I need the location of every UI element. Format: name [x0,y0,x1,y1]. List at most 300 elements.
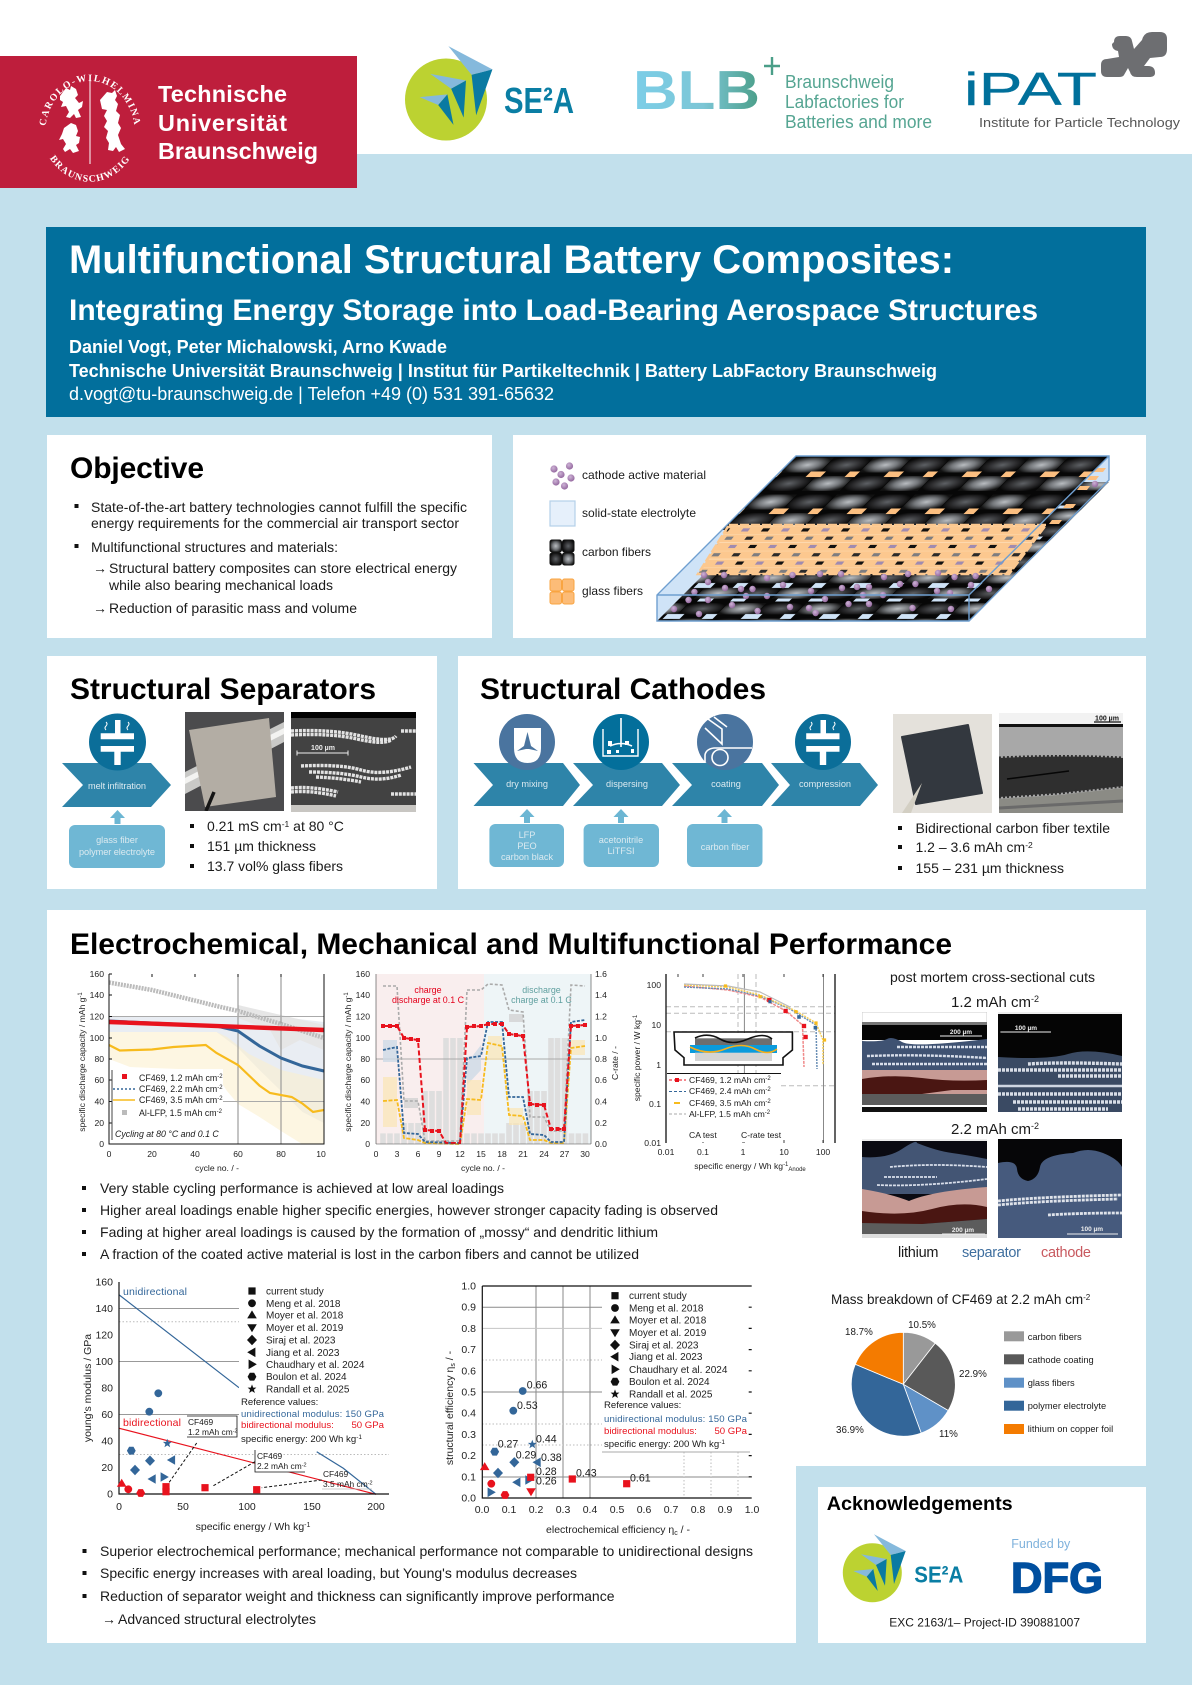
legend chart 4: Siraj et al. 2023 [266,1336,336,1346]
right ticks chart 2: 1.6 [595,969,607,979]
left ticks chart 2: 120 [356,1012,370,1022]
callouts chart 4: -2 [302,1462,307,1468]
legend chart 3 [667,1074,782,1142]
chart: mass breakdown pie [831,1292,1113,1440]
axis ticks chart 4: 20 [101,1462,113,1474]
process chevrons: dispersing [606,779,648,789]
separator properties list: 151 µm thickness [207,838,316,854]
heading: acknowledgements: Acknowledgements [827,1493,1013,1515]
legend chart 1: -2 [217,1074,223,1080]
icon: electrolyte square [550,501,575,526]
axis ticks chart 3: 0.01 [644,1138,661,1148]
legend chart 1: -2 [217,1085,223,1091]
axis ticks chart 5: 0.1 [461,1471,476,1483]
x ticks chart 2: 15 [476,1149,486,1159]
rate annotations: charge at 0.1 C [511,995,572,1005]
y-axis ticks chart 1: 60 [94,1075,104,1085]
right ticks chart 2: 1.0 [595,1033,607,1043]
reference box chart 5: unidirectional modulus: 150 GPa [604,1414,748,1425]
logo: TU Braunschweig: CAROLO-WILHELMINA [40,74,140,126]
logo: BLB Braunschweig Labfactories [633,57,932,132]
axis titles chart 1: cycle no. / - [195,1163,239,1173]
axis ticks chart 5: 0.7 [664,1504,678,1516]
legend chart 5: Meng et al. 2018 [629,1304,704,1314]
axis ticks chart 5: 0.6 [637,1504,651,1516]
pie title: -2 [1083,1293,1091,1302]
axis ticks chart 5: 0.7 [461,1344,476,1356]
reference box chart 4: specific energy: 200 Wh kg [241,1434,356,1445]
cross-section title: post mortem cross-sectional cuts [890,969,1095,985]
header logo strip [0,0,1192,188]
separator properties list [190,818,344,874]
y-axis ticks chart 1: 80 [94,1054,104,1064]
input box: LFP PEO carbon black: LFP [519,830,535,840]
photo: cathode micrograph: 100 µm [1095,716,1119,722]
arrow up: dispersing input [614,809,628,823]
left ticks chart 2: 40 [360,1096,370,1106]
label: 1.2 mAh: 1.2 mAh cm [951,994,1031,1011]
reference box chart 4: 50 GPa [351,1420,385,1431]
x ticks chart 2: 0 [374,1149,379,1159]
value labels chart 5 [498,1379,651,1487]
legend chart 4 [247,1286,365,1396]
input box: acetonitrile LiTFSI: LiTFSI [607,846,635,856]
callouts chart 4: CF469 [323,1469,348,1479]
reference box chart 5: -1 [719,1439,725,1446]
x-axis ticks chart 1: 80 [276,1149,286,1159]
input box: glass fiber polymer electrolyte: glass fiber [96,835,138,845]
y-axis ticks chart 1: 40 [94,1096,104,1106]
schematic legend: solid-state electrolyte [582,506,696,520]
series markers chart 5 [480,1387,630,1499]
x ticks chart 2: 12 [455,1149,465,1159]
axis ticks chart 3: 10 [651,1020,661,1030]
axis ticks chart 3: 100 [816,1147,830,1157]
value labels chart 5: 0.66 [527,1379,547,1391]
legend chart 3: -2 [765,1110,771,1116]
legend chart 4: Moyer et al. 2019 [266,1323,344,1334]
axis ticks chart 4: 80 [101,1382,113,1394]
chart: capacity versus cycle number: specific discharge capacity / mAh g [77,998,87,1132]
right ticks chart 2: 0.2 [595,1118,607,1128]
value labels chart 5: 0.28 [536,1466,557,1478]
input box: carbon fiber [687,824,762,867]
photo: separator sheet [185,712,284,811]
logo: SE2A [405,46,574,141]
input box: glass fiber polymer electrolyte: polymer electrolyte [79,847,155,857]
axis ticks chart 3: 100 [647,980,661,990]
cathode properties list [898,820,1110,876]
axis ticks chart 4: 0 [116,1501,122,1513]
right ticks chart 2: 0.8 [595,1054,607,1064]
callouts chart 4: -2 [368,1480,373,1486]
legend chart 5 [610,1291,728,1400]
x ticks chart 2: 3 [395,1149,400,1159]
objective bullet list: State-of-the-art battery technologies cannot fulfill the specific [91,499,467,515]
photo: separator micrograph: 100 µm [311,745,335,752]
icon: glass fibers [550,579,574,604]
icon: hot press [89,714,146,770]
material outlook list: Specific energy increases with areal loading, but Young's modulus decreases [100,1565,577,1581]
panel: structural cathodes [458,656,1146,889]
legend chart 5: Jiang et al. 2023 [629,1352,703,1363]
axis ticks chart 4: 160 [95,1276,113,1288]
micrograph: 1.2 mAh overview [862,1012,987,1112]
label: 1.2 mAh: -2 [1031,994,1039,1004]
axis ticks chart 5: 0.0 [475,1504,489,1516]
logo: TU Braunschweig: Technische [158,81,287,107]
reference box chart 4: unidirectional modulus: 150 GPa [241,1409,385,1420]
arrow up: coating input [717,809,732,823]
legend chart 4: Meng et al. 2018 [266,1299,341,1310]
logo: BLB Braunschweig Labfactories: Labfactories for [785,92,904,112]
x-axis ticks chart 1 [107,1149,326,1159]
chart: young's modulus versus specific energy: young's modulus / GPa [82,1334,94,1442]
cathode properties list: 1.2 – 3.6 mAh cm [916,839,1025,855]
cycling findings list: Fading at higher areal loadings is caused by the formation of „mossy“ and dendritic lithium [100,1224,658,1240]
axis titles chart 5: c [674,1530,678,1537]
legend chart 4: current study [266,1286,324,1298]
title: Multifunctional Structural Battery Composites: [69,238,954,282]
axis ticks chart 3: 0.1 [649,1099,661,1109]
schematic legend: cathode active material [582,468,706,482]
axis ticks chart 5: 0.8 [691,1504,705,1516]
chart: structural versus electrochemical efficiency [444,1280,759,1537]
pie legend: lithium on copper foil [1028,1424,1113,1434]
chart: ragone plot: specific power / W kg [632,1020,642,1101]
micrograph: 2.2 mAh detail [998,1139,1122,1238]
pie percentages: 11% [939,1429,958,1440]
left ticks chart 2: 60 [360,1075,370,1085]
pie legend: cathode coating [1028,1355,1094,1365]
right ticks chart 2: 0.4 [595,1096,607,1106]
left ticks chart 2: 0 [365,1139,370,1149]
axis ticks chart 4: 100 [238,1501,256,1513]
reference box chart 5: specific energy: 200 Wh kg [604,1439,719,1450]
objective bullet list [74,499,467,616]
x ticks chart 2 [374,1149,590,1159]
separator properties list: -1 [282,819,290,829]
cross-section colour key: lithium [898,1245,938,1261]
schematic legend: carbon fibers [582,545,651,559]
legend chart 3: -2 [765,1099,771,1105]
value labels chart 5: 0.44 [536,1433,557,1445]
chart: capacity versus cycle number [77,969,326,1173]
x ticks chart 2: 9 [437,1149,442,1159]
legend chart 4: Moyer et al. 2018 [266,1310,344,1322]
y-axis ticks chart 1: 0 [99,1139,104,1149]
heading: structural separators: Structural Separators [70,673,376,706]
legend chart 5: current study [629,1291,687,1302]
value labels chart 5: 0.61 [630,1473,651,1485]
legend chart 1: CF469, 2.2 mAh cm [139,1084,217,1094]
separator properties list: 0.21 mS cm [207,818,282,834]
axis ticks chart 4: 200 [367,1501,385,1513]
cathode properties list: Bidirectional carbon fiber textile [916,820,1110,836]
chart: ragone plot [632,974,835,1173]
x ticks chart 2: 18 [497,1149,507,1159]
subtitle: Integrating Energy Storage into Load-Bearing Aerospace Structures [69,294,1038,327]
legend chart 1: -2 [217,1096,223,1102]
reference box chart 5: 50 GPa [714,1426,748,1437]
legend chart 5: Moyer et al. 2018 [629,1316,707,1326]
label: 2.2 mAh: -2 [1031,1121,1039,1131]
micrograph: 2.2 mAh overview: 200 µm [952,1227,974,1234]
layered composite block [657,456,1109,621]
legend chart 1: -2 [217,1109,223,1115]
axis ticks chart 4: 40 [101,1436,113,1448]
legend chart 3: -2 [765,1087,771,1093]
series markers chart 4 [117,1389,260,1497]
right ticks chart 2: 0.0 [595,1139,607,1149]
region labels chart 4: unidirectional [123,1286,187,1298]
value labels chart 5: 0.38 [541,1452,562,1464]
reference box chart 4: bidirectional modulus: [241,1420,334,1431]
reference box chart 4: Reference values: [241,1397,318,1408]
logo: iPAT: iPAT [964,63,1097,115]
y-axis ticks chart 1: 160 [90,969,104,979]
legend chart 3: -2 [765,1076,771,1082]
cathode properties list: -2 [1025,840,1033,850]
axis ticks chart 5: 0.0 [461,1492,476,1504]
rate annotations: charge [414,985,442,995]
process chevrons: dry mixing [506,779,548,789]
x-axis ticks chart 1: 0 [107,1149,112,1159]
legend chart 1: CF469, 1.2 mAh cm [139,1073,217,1083]
chart: rate capability [343,969,620,1173]
input box: glass fiber polymer electrolyte [69,825,165,868]
axis ticks chart 5: 0.2 [529,1504,543,1516]
logo: iPAT [964,32,1181,130]
micrograph: 1.2 mAh overview: 200 µm [950,1029,972,1036]
x-axis ticks chart 1: 60 [233,1149,243,1159]
logo: TU Braunschweig [0,56,357,188]
pie legend: glass fibers [1028,1378,1075,1388]
cycling findings list: Higher areal loadings enable higher specific energies, however stronger capacity fading is observed [100,1202,718,1218]
objective bullet list: → [93,600,107,616]
axis titles chart 4: -1 [304,1522,310,1529]
axis ticks chart 4: 140 [95,1303,113,1315]
material outlook list: Reduction of separator weight and thickness can significantly improve performance [100,1588,615,1604]
legend chart 3: CF469, 3.5 mAh cm [689,1098,765,1108]
callouts chart 4: 2.2 mAh cm [257,1461,302,1471]
axis ticks chart 5: 0.5 [610,1504,624,1516]
axis ticks chart 3: 1 [741,1147,746,1157]
x ticks chart 2: 27 [560,1149,569,1159]
material outlook list: Superior electrochemical performance; mechanical performance not comparable to unidirectional designs [100,1543,753,1559]
input box: acetonitrile LiTFSI [584,824,659,867]
x ticks chart 2: 24 [539,1149,549,1159]
legend chart 1: Cycling at 80 °C and 0.1 C [115,1129,219,1139]
axis ticks chart 4: 100 [95,1356,113,1368]
left ticks chart 2: 140 [356,990,370,1000]
photo: cathode micrograph [999,713,1123,813]
axis ticks chart 5: 0.4 [461,1408,476,1420]
left ticks chart 2: 100 [356,1033,370,1043]
rate annotations: discharge at 0.1 C [392,995,465,1005]
callouts chart 4 [169,1416,373,1489]
reference box chart 4: -1 [356,1434,362,1441]
process chevrons: compression [799,779,851,789]
callouts chart 4: -2 [233,1428,238,1434]
authors: Daniel Vogt, Peter Michalowski, Arno Kwade [69,337,447,357]
legend chart 5: Randall et al. 2025 [629,1390,713,1400]
pie title: Mass breakdown of CF469 at 2.2 mAh cm [831,1292,1083,1307]
cross-section colour key [898,1245,1091,1261]
chart: ragone plot: -1 [633,1014,639,1020]
y-axis ticks chart 1 [90,969,104,1149]
logo: iPAT: Institute for Particle Technology [979,116,1181,130]
right ticks chart 2: 1.2 [595,1012,607,1022]
panel: performance [47,910,1146,1643]
objective bullet list: Structural battery composites can store electrical energy [109,560,457,576]
axis ticks chart 4 [95,1276,385,1513]
pie legend [1004,1331,1113,1434]
legend chart 3: CA test [689,1130,717,1140]
legend chart 3: Al-LFP, 1.5 mAh cm [689,1109,765,1119]
axis ticks chart 4: 50 [177,1501,189,1513]
callouts chart 4: CF469 [188,1417,213,1427]
cathode properties list: 155 – 231 µm thickness [916,860,1064,876]
logo: TU Braunschweig: Braunschweig [158,138,318,164]
axis ticks chart 5: 0.9 [461,1302,476,1314]
input box: LFP PEO carbon black [489,824,564,867]
axis ticks chart 3: 0.1 [697,1147,709,1157]
logo: BLB Braunschweig Labfactories: BLB [633,59,760,121]
panel: composite schematic [513,435,1146,638]
affiliations: Technische Universität Braunschweig | Institut für Partikeltechnik | Battery LabFactory Braunschweig [69,361,937,381]
objective bullet list: Reduction of parasitic mass and volume [109,600,357,616]
axis titles chart 3: -1 [783,1162,789,1168]
label: 2.2 mAh: 2.2 mAh cm [951,1121,1031,1138]
axis ticks chart 3: 1 [656,1060,661,1070]
logo: DFG funding: DFG [1011,1555,1103,1603]
bidirectional label: bidirectional [123,1417,181,1429]
right ticks chart 2 [595,969,607,1149]
input box: acetonitrile LiTFSI: acetonitrile [599,835,643,845]
logo: SE2A small: SE²A [914,1562,963,1588]
cross-section colour key: cathode [1041,1245,1091,1261]
icon: compression [795,714,851,770]
logo: TU Braunschweig: Universität [158,110,287,136]
axis ticks chart 5: 0.6 [461,1365,476,1377]
title banner [46,227,1146,417]
axis ticks chart 3 [644,980,830,1157]
legend chart 5: Boulon et al. 2024 [629,1377,710,1388]
left ticks chart 2: 20 [360,1118,370,1128]
x-axis ticks chart 1: 10 [316,1149,326,1159]
legend chart 1 [113,1073,223,1139]
value labels chart 5: 0.26 [536,1475,557,1487]
icon: coating [697,714,753,770]
heading: objective: Objective [70,452,204,485]
legend chart 4: Chaudhary et al. 2024 [266,1360,365,1371]
axis ticks chart 5: 0.4 [583,1504,597,1516]
pie legend: polymer electrolyte [1028,1401,1106,1411]
input box: LFP PEO carbon black: PEO [517,841,537,851]
pie percentages: 10.5% [908,1320,936,1331]
pie percentages [836,1320,987,1440]
rate annotations [392,985,572,1005]
pie percentages: 36.9% [836,1425,864,1436]
legend chart 4: Randall et al. 2025 [266,1384,350,1396]
axis ticks chart 5: 0.3 [461,1429,476,1441]
axis ticks chart 4: 0 [107,1488,113,1500]
icon: cathode particles [550,462,575,490]
objective bullet list: while also bearing mechanical loads [108,577,333,593]
chart: structural versus electrochemical efficiency: structural efficiency η [444,1367,456,1465]
objective bullet list: → [93,560,107,576]
micrograph: 1.2 mAh detail [998,1012,1122,1112]
x-axis ticks chart 1: 40 [190,1149,200,1159]
callouts chart 4: 3.5 mAh cm [323,1479,368,1489]
icon: dispersing [593,714,649,770]
reference box chart 5 [602,1287,750,1452]
rate annotations: discharge [522,985,561,995]
legend chart 5: Siraj et al. 2023 [629,1340,699,1352]
panel: objective [47,435,492,638]
axis titles chart 4: specific energy / Wh kg [196,1521,304,1533]
y-axis ticks chart 1: 100 [90,1033,104,1043]
axis titles chart 5: electrochemical efficiency η [546,1524,674,1536]
contact: d.vogt@tu-braunschweig.de | Telefon +49 (0) 531 391-65632 [69,384,554,404]
axis titles chart 2: cycle no. / - [461,1163,505,1173]
arrow up: mixing input [520,809,534,823]
axis ticks chart 5: 1.0 [745,1504,759,1516]
post mortem cross-sections [862,969,1122,1261]
left ticks chart 2 [356,969,370,1149]
project id: EXC 2163/1– Project-ID 390881007 [889,1616,1080,1630]
material outlook list: Advanced structural electrolytes [118,1611,316,1627]
input box: LFP PEO carbon black: carbon black [501,852,553,862]
axis ticks chart 3: 10 [779,1147,789,1157]
logo: SE2A: SE²A [504,80,574,121]
axis ticks chart 4: 60 [101,1409,113,1421]
right ticks chart 2: 1.4 [595,990,607,1000]
value labels chart 5: 0.29 [516,1449,536,1461]
cycling findings list: A fraction of the coated active material is lost in the carbon fibers and cannot be utilized [100,1246,639,1262]
objective bullet list: Multifunctional structures and materials: [91,539,338,555]
chart: young's modulus versus specific energy [82,1276,389,1533]
callouts chart 4: 1.2 mAh cm [188,1427,233,1437]
legend chart 4: Jiang et al. 2023 [266,1348,340,1359]
micrograph: 2.2 mAh detail: 100 µm [1081,1226,1103,1233]
panel: acknowledgements [818,1487,1146,1643]
heading: structural cathodes: Structural Cathodes [480,673,766,706]
axis ticks chart 4: 120 [95,1330,113,1342]
process chevrons [474,763,878,806]
y-axis ticks chart 1: 20 [94,1118,104,1128]
axis titles chart 3: specific energy / Wh kg [694,1161,783,1171]
icon: carbon fibers [550,540,574,565]
y-axis ticks chart 1: 140 [90,990,104,1000]
reference box chart 4 [239,1283,385,1449]
axis ticks chart 5: 0.8 [461,1323,476,1335]
legend chart 3: CF469, 2.4 mAh cm [689,1086,765,1096]
inset: pouch cell sketch [674,1032,792,1065]
objective bullet list: energy requirements for the commercial air transport sector [91,515,459,531]
left ticks chart 2: 160 [356,969,370,979]
reference box chart 5: Reference values: [604,1400,681,1411]
schematic legend [550,462,706,604]
pie percentages: 18.7% [845,1327,873,1338]
logo: DFG funding: Funded by [1011,1537,1071,1551]
left ticks chart 2: 80 [360,1054,370,1064]
pie legend: carbon fibers [1028,1332,1082,1342]
panel: structural separators [47,656,437,889]
pie percentages: 22.9% [959,1369,987,1380]
separator properties list: at 80 °C [289,818,344,834]
